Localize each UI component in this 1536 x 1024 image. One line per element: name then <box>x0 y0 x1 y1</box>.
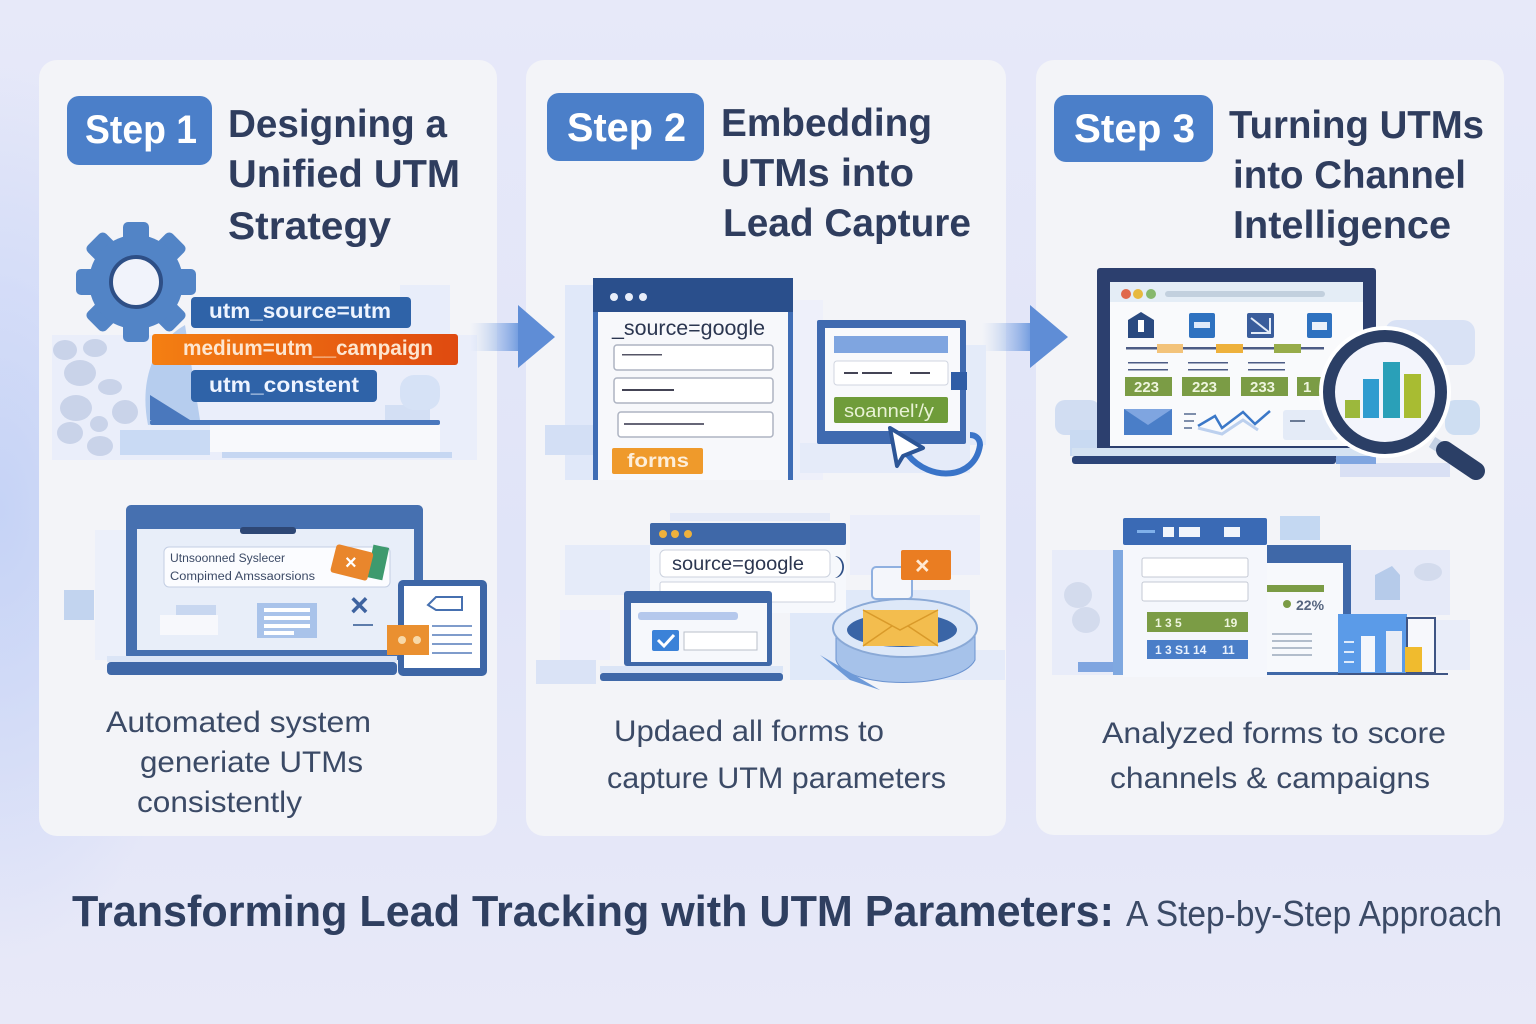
icon: gear <box>76 222 196 342</box>
status card: Compimed Amssaorsions <box>170 571 315 583</box>
browser with source field: source=google <box>672 553 804 575</box>
icon: list tile <box>257 603 317 638</box>
step 2 description: capture UTM parameters <box>607 762 946 795</box>
step 1 heading: Unified UTM <box>228 153 460 196</box>
step 3 description <box>1102 717 1446 795</box>
step 3 heading: Turning UTMs <box>1229 104 1484 147</box>
step 2 heading: UTMs into <box>721 152 914 195</box>
green metrics: 233 <box>1250 379 1275 396</box>
step 1 badge: Step 1 <box>85 108 197 152</box>
step 3 badge <box>1054 95 1213 162</box>
form window <box>593 278 793 480</box>
green metrics: 1 <box>1303 379 1311 396</box>
step 3 heading: Intelligence <box>1233 204 1451 247</box>
medium and campaign tag <box>152 334 458 365</box>
panel: step 1 card <box>39 60 497 836</box>
icon: magnifier with bar chart <box>1319 326 1476 471</box>
status card: Utnsoonned Syslecer <box>170 553 285 565</box>
panel: step 2 card <box>526 60 1006 836</box>
step 3 description: channels & campaigns <box>1110 762 1430 795</box>
browser with source field <box>650 523 846 613</box>
green row: 19 <box>1224 616 1238 630</box>
utm_constent tag <box>191 370 377 402</box>
step 3 heading <box>1229 104 1484 247</box>
illustration: step 1 pale backdrop <box>52 285 477 460</box>
green button: soannel'/y <box>844 401 934 421</box>
step 1 heading: Strategy <box>228 205 391 248</box>
icon: mail <box>1124 409 1172 435</box>
panel: step 3 card <box>1036 60 1504 835</box>
main form window <box>1113 518 1267 677</box>
secondary report window: 22% <box>1296 597 1325 613</box>
icon: blue x: × <box>350 587 369 623</box>
step 1 description: Automated system <box>106 706 371 739</box>
illustration: step 3 pale backdrop <box>1055 320 1480 477</box>
dashboard laptop <box>1072 268 1376 464</box>
blue row: 1 3 S1 14 <box>1155 643 1207 657</box>
icon: orange x tile <box>330 544 389 581</box>
status card <box>164 547 390 587</box>
illustration: step 2 pale backdrop <box>545 285 986 480</box>
line chart <box>1184 411 1270 434</box>
icon: orange x tile: × <box>345 552 357 574</box>
step 2 heading: Embedding <box>721 102 932 145</box>
text lines <box>1128 362 1285 370</box>
utm_source tag: utm_source=utm <box>209 300 391 323</box>
step 1 heading: Designing a <box>228 103 447 146</box>
step 2 description: Updaed all forms to <box>614 715 884 748</box>
utm_source tag <box>191 297 411 328</box>
icon: tablet <box>387 580 487 676</box>
secondary report window <box>1267 545 1351 675</box>
green metrics: 223 <box>1134 379 1159 396</box>
forms button <box>612 448 703 474</box>
arrow: step 2 to step 3 <box>982 305 1068 368</box>
utm_constent tag: utm_constent <box>209 374 359 397</box>
blue row <box>1147 640 1248 659</box>
green metrics: 223 <box>1192 379 1217 396</box>
illustration: step 3 lower backdrop <box>1052 516 1470 675</box>
blue row: 11 <box>1222 643 1235 657</box>
green metrics <box>1125 377 1321 396</box>
small blue building chart <box>1338 614 1448 675</box>
step 2 badge <box>547 93 704 161</box>
illustration: step 2 lower backdrop <box>536 513 1005 684</box>
step 1 heading <box>228 103 460 248</box>
icon: cursor with loop <box>890 428 980 473</box>
form window: _source=google <box>611 317 765 340</box>
small laptop <box>600 591 783 681</box>
icon: orange x box <box>872 550 951 599</box>
title: Transforming Lead Tracking with UTM Parameters: <box>72 887 1114 936</box>
step 1 description: consistently <box>137 786 302 819</box>
step 2 heading: Lead Capture <box>723 202 971 245</box>
medium and campaign tag: medium=utm__campaign <box>183 337 433 360</box>
step 2 heading <box>721 102 971 245</box>
step 2 badge: Step 2 <box>567 106 686 150</box>
illustration: step 1 laptop <box>64 505 423 675</box>
step 2 description <box>607 715 946 795</box>
channel tags <box>1126 344 1324 353</box>
step 3 description: Analyzed forms to score <box>1102 717 1446 750</box>
green row <box>1147 612 1248 632</box>
green button <box>834 397 948 423</box>
small form panel <box>817 320 967 444</box>
step 1 description: generiate UTMs <box>140 746 363 779</box>
icon: envelope in ring <box>820 599 977 690</box>
icon: orange x box: × <box>915 552 930 580</box>
step 3 heading: into Channel <box>1233 154 1466 197</box>
arrow: step 1 to step 2 <box>470 305 555 368</box>
channel icons <box>1128 312 1332 338</box>
step 1 badge <box>67 96 212 165</box>
forms button: forms <box>627 451 689 472</box>
step 3 badge: Step 3 <box>1074 107 1195 151</box>
step 1 description <box>106 706 371 819</box>
green row: 1 3 5 <box>1155 616 1182 630</box>
title: A Step-by-Step Approach <box>1126 893 1502 934</box>
